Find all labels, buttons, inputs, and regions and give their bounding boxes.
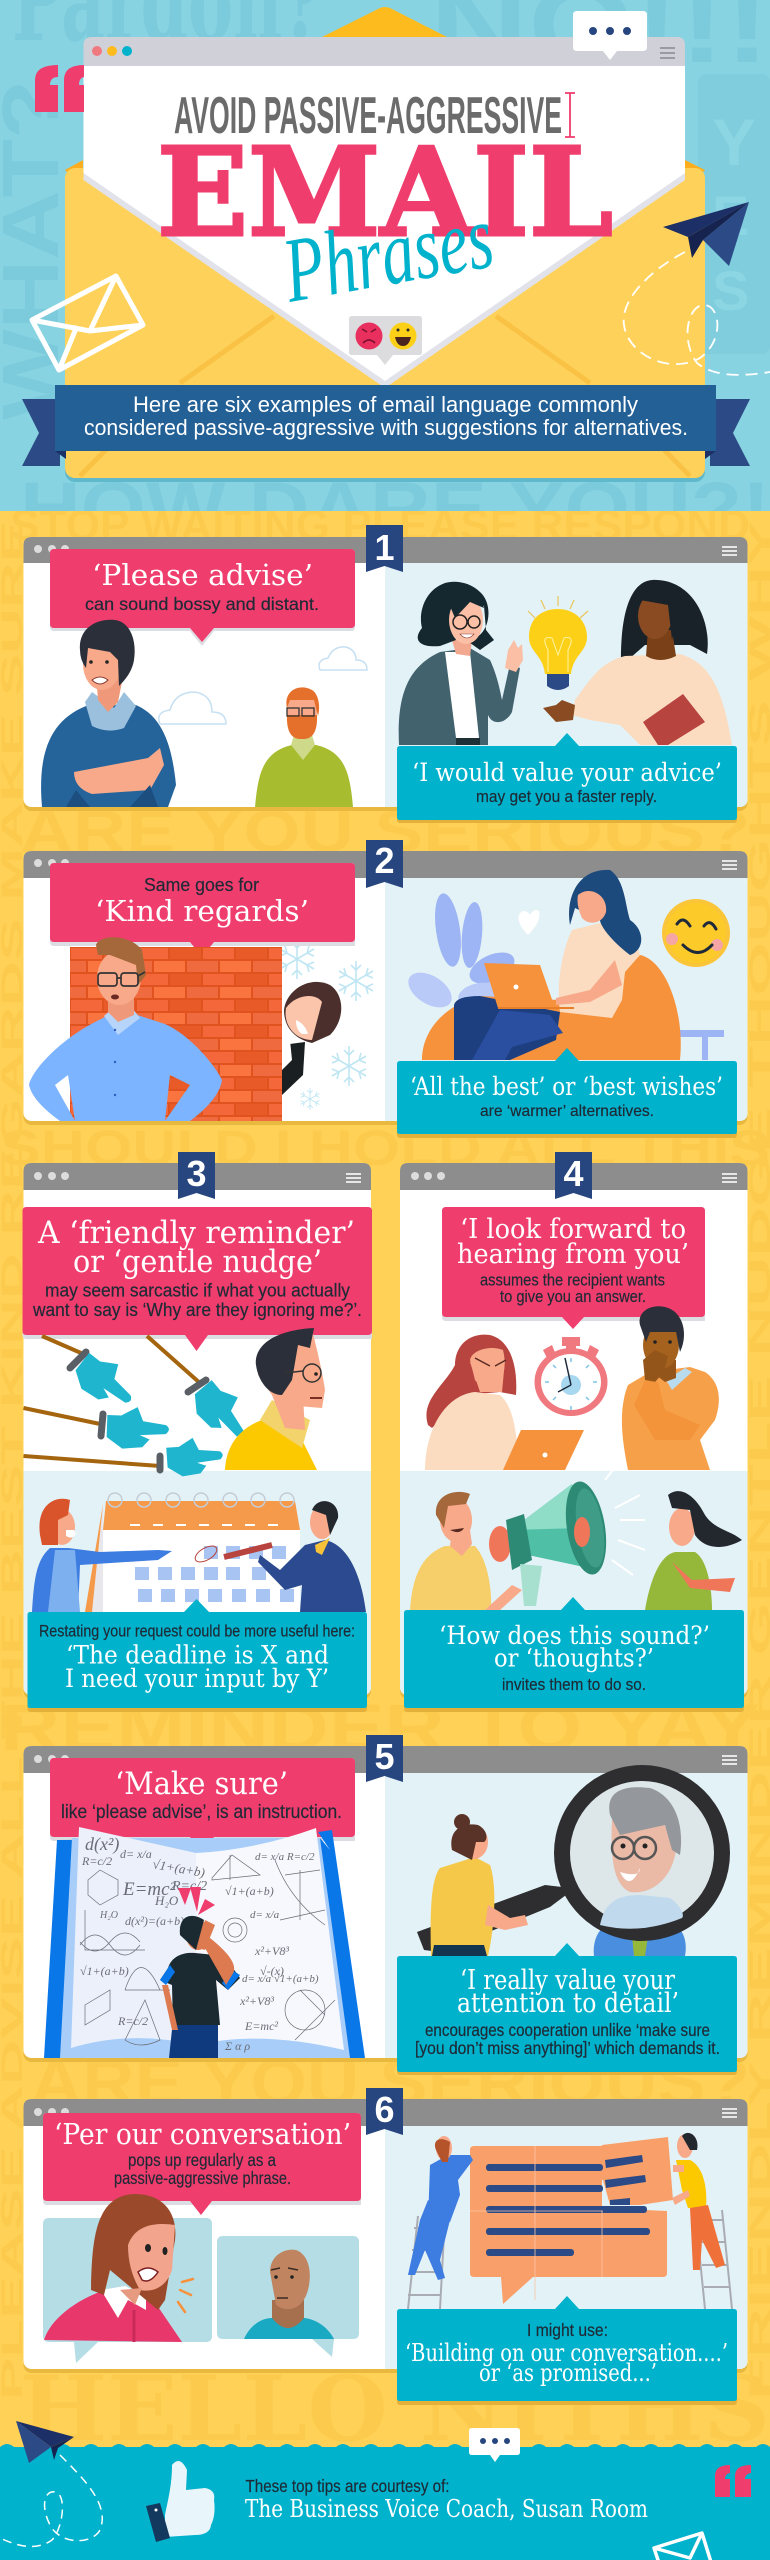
callout: the deadline: ‘The deadline is X and: [66, 1640, 329, 1670]
illustration: man in front of wall: [29, 937, 222, 1121]
dashed flight path small: [0, 2455, 102, 2546]
icon: paper airplane: [663, 202, 749, 266]
panel 6: [24, 2088, 748, 2405]
illustration: woman with folder: [543, 580, 732, 745]
illustration: open book of formulas: d(x²)=(a+b)/a²: [125, 1914, 197, 1928]
background lettering: yellow section: HELLO NITHS: [20, 2356, 770, 2462]
callout: per our conversation: passive-aggressive phrase.: [114, 2168, 291, 2188]
callout: i look forward: assumes the recipient wants: [480, 1271, 665, 1289]
callout: i really value: encourages cooperation unlike ‘make sure: [425, 2020, 710, 2040]
illustration: open book of formulas: √1+(a+b): [225, 1884, 274, 1898]
illustration: open book of formulas: x²+V8³: [254, 1944, 289, 1958]
callout: i look forward: ‘I look forward to: [460, 1214, 686, 1245]
callout: all the best: ‘All the best’ or ‘best wishes’: [410, 1072, 723, 1101]
illustration: megaphone: [489, 1458, 645, 1606]
callout: the deadline: Restating your request could be more useful here:: [39, 1622, 355, 1640]
footer text: [245, 2476, 648, 2523]
callout: friendly reminder: or ‘gentle nudge’: [73, 1244, 322, 1280]
callout: make sure: ‘Make sure’: [115, 1766, 288, 1802]
illustration: ladders and workers: [408, 2133, 732, 2309]
ribbon banner: Here are six examples of email language commonly: [133, 392, 638, 417]
illustration: magnified smiling man: [554, 1765, 730, 1956]
illustration: open book of formulas: R=c/2: [117, 2014, 148, 2028]
icon: hamburger menu: [660, 47, 675, 59]
background lettering: yellow section: ARE YOU SERIOUS?: [30, 2045, 750, 2119]
callout: i might use: [397, 2296, 737, 2405]
callout: friendly reminder: want to say is ‘Why are they ignoring me?’.: [32, 1300, 362, 1320]
callout: i would value your advice: [397, 733, 737, 823]
callout: friendly reminder: A ‘friendly reminder’: [37, 1215, 355, 1251]
callout: i look forward: hearing from you’: [457, 1239, 689, 1270]
illustration: woman peeking behind wall: [282, 982, 341, 1095]
callout: i would value your advice: may get you a faster reply.: [476, 788, 657, 806]
header section background: S: [712, 259, 749, 322]
header section background: Y: [712, 105, 756, 179]
icon: speech bubble small: [469, 2428, 520, 2462]
illustration: open book of formulas: d= x/a: [120, 1847, 152, 1861]
background lettering: yellow section: REMINDER TO YAY: [0, 1690, 760, 1764]
illustration: open book of formulas: H₂O: [154, 1893, 179, 1908]
illustration: brick wall: [70, 947, 282, 1121]
illustration: open book of formulas: R=c/2: [171, 1879, 207, 1894]
footer text: These top tips are courtesy of:: [246, 2476, 450, 2496]
illustration: man in blue pointing: [32, 1499, 172, 1612]
badge number 3: [178, 1152, 215, 1199]
illustration: man with crossed arms: [41, 620, 176, 807]
panel 4: [400, 1152, 748, 1712]
callout: how does this sound: invites them to do so.: [502, 1675, 646, 1694]
illustration: woman with green top: [645, 1491, 742, 1610]
callout: all the best: [397, 1048, 737, 1138]
illustration: calendar: [85, 1493, 300, 1612]
callout: how does this sound: ‘How does this sound?’: [439, 1621, 710, 1650]
icon: quotation marks: [35, 65, 84, 112]
illustration: open book of formulas: E=mc²: [122, 1879, 176, 1900]
badge number 2: [366, 840, 403, 888]
badge number 4: [555, 1152, 592, 1199]
callout: i really value: attention to detail’: [457, 1988, 679, 2019]
dashed flight path: [624, 252, 770, 375]
header section background: E: [712, 184, 749, 247]
callout: how does this sound: or ‘thoughts?’: [494, 1644, 654, 1672]
callout: i look forward: to give you an answer.: [500, 1288, 646, 1306]
illustration: open book of formulas: E=mc²: [244, 2019, 278, 2033]
icon: speech bubble with dots: [573, 11, 647, 60]
badge number 2: 2: [374, 840, 395, 881]
callout: per our conversation: pops up regularly as a: [128, 2150, 276, 2170]
callout: the deadline: [28, 1599, 367, 1712]
illustration: thinking man in orange: [622, 1306, 719, 1470]
callout: i look forward: [442, 1207, 705, 1329]
illustration: open book of formulas: d= x/a √1+(a+b): [242, 1973, 319, 1985]
illustration: plant: [402, 892, 519, 1015]
badge number 6: [366, 2088, 403, 2135]
icon: quotation marks footer: [715, 2465, 751, 2497]
badge number 5: [366, 1735, 403, 1782]
illustration: woman video bubble: [43, 2194, 212, 2363]
callout: kind regards: ‘Kind regards’: [95, 894, 309, 928]
callout: i really value: ‘I really value your: [460, 1965, 675, 1996]
callout: kind regards: [50, 863, 355, 957]
callout: i might use: or ‘as promised...’: [479, 2359, 657, 2387]
title: EMAIL: EMAIL: [157, 120, 613, 264]
illustration: open book of formulas: d= x/a: [250, 1909, 280, 1921]
illustration: clouds: [159, 647, 367, 724]
background lettering: yellow section: SHOULD I HOLD ALL THIS: [0, 1120, 770, 1176]
icon: envelope outline: [32, 276, 143, 370]
illustration: man in navy: [258, 1501, 366, 1612]
illustration: woman with glasses: [399, 582, 523, 745]
background lettering: yellow section: [0, 501, 770, 2462]
illustration: man video bubble: [217, 2236, 359, 2357]
callout: i might use: I might use:: [527, 2320, 608, 2340]
callout: how does this sound: [404, 1597, 744, 1712]
callout: per our conversation: ‘Per our conversation’: [54, 2117, 351, 2151]
callout: kind regards: Same goes for: [144, 875, 259, 895]
illustration: open book of formulas: d(x²): [85, 1834, 119, 1855]
background lettering: yellow section: STOP WAITING PLEASE RESPOND: [10, 501, 750, 550]
callout: i would value your advice: ‘I would value your advice’: [412, 758, 722, 787]
badge number 3: 3: [186, 1153, 207, 1194]
badge number 4: 4: [563, 1153, 584, 1194]
callout: i really value: [you don’t miss anything]’ which demands it.: [415, 2038, 720, 2058]
footer band: [0, 2421, 770, 2560]
illustration: open book of formulas: √1+(a+b): [151, 1856, 206, 1880]
header: envelope and browser window: [65, 7, 705, 482]
illustration: woman on beanbag with laptop: [422, 870, 730, 1060]
illustration: woman holding magnifying glass: [417, 1814, 566, 1956]
illustration: open book of formulas: √1+(a+b): [80, 1964, 129, 1978]
badge number 1: 1: [374, 527, 395, 568]
icon: thumbs up: [146, 2461, 215, 2542]
illustration: puzzled man at book: [160, 1887, 240, 2058]
icon: envelope outline footer: [654, 2533, 715, 2560]
panel 2: [24, 840, 748, 1138]
callout: per our conversation: [43, 2113, 361, 2215]
illustration: red-haired woman with laptop: [425, 1335, 584, 1470]
badge number 1: [366, 525, 403, 572]
illustration: open book of formulas: √-(x): [260, 1964, 284, 1978]
ribbon banner: [22, 385, 750, 466]
illustration: open book of formulas: [44, 1827, 365, 2058]
callout: make sure: like ‘please advise’, is an instruction.: [61, 1801, 342, 1823]
ribbon banner: considered passive-aggressive with suggestions for alternatives.: [84, 415, 688, 440]
illustration: light bulb: [528, 596, 588, 690]
callout: please advise: [50, 549, 355, 646]
icon: emoji bubble: [349, 316, 422, 365]
callout: i really value: [397, 1943, 737, 2075]
badge number 6: 6: [374, 2089, 395, 2130]
callout: all the best: are ‘warmer’ alternatives.: [480, 1103, 654, 1120]
panel 3: [22, 1152, 372, 1712]
icon: paper airplane small: [16, 2421, 74, 2463]
illustration: pointing hands on sticks: [24, 1336, 258, 1477]
callout: the deadline: I need your input by Y’: [65, 1664, 329, 1693]
callout: please advise: can sound bossy and distant.: [85, 594, 319, 614]
title: Phrases script: Phrases: [275, 185, 500, 322]
header section background: HOW DARE YOU?!: [20, 467, 770, 552]
header section background: [0, 0, 770, 552]
callout: friendly reminder: [22, 1207, 372, 1351]
illustration: man with megaphone: [410, 1492, 522, 1610]
illustration: stopwatch: [534, 1337, 608, 1416]
icon: text cursor: [565, 93, 575, 137]
badge number 5: 5: [374, 1736, 395, 1777]
illustration: open book of formulas: Σ α ρ: [224, 2039, 250, 2053]
callout: make sure: [50, 1758, 355, 1852]
callout: please advise: ‘Please advise’: [92, 558, 313, 592]
illustration: open book of formulas: R=c/2: [81, 1854, 112, 1868]
illustration: open book of formulas: H₂O: [99, 1910, 118, 1921]
illustration: red-bearded man in green shirt: [255, 687, 353, 807]
illustration: snowflakes: [280, 939, 373, 1110]
browser dots: [92, 46, 132, 56]
illustration: puzzle speech bubble: [470, 2137, 673, 2304]
footer text: The Business Voice Coach, Susan Room: [245, 2495, 648, 2523]
panel 1: [24, 525, 748, 823]
illustration: open book of formulas: d= x/a R=c/2: [255, 1851, 315, 1863]
background lettering: yellow section: ARE YOU SERIOUS?: [20, 798, 750, 865]
illustration: man with glasses: [225, 1328, 325, 1470]
illustration: open book of formulas: x²+V8³: [239, 1994, 274, 2008]
callout: friendly reminder: may seem sarcastic if what you actually: [45, 1280, 350, 1300]
panel 5: [24, 1735, 748, 2075]
